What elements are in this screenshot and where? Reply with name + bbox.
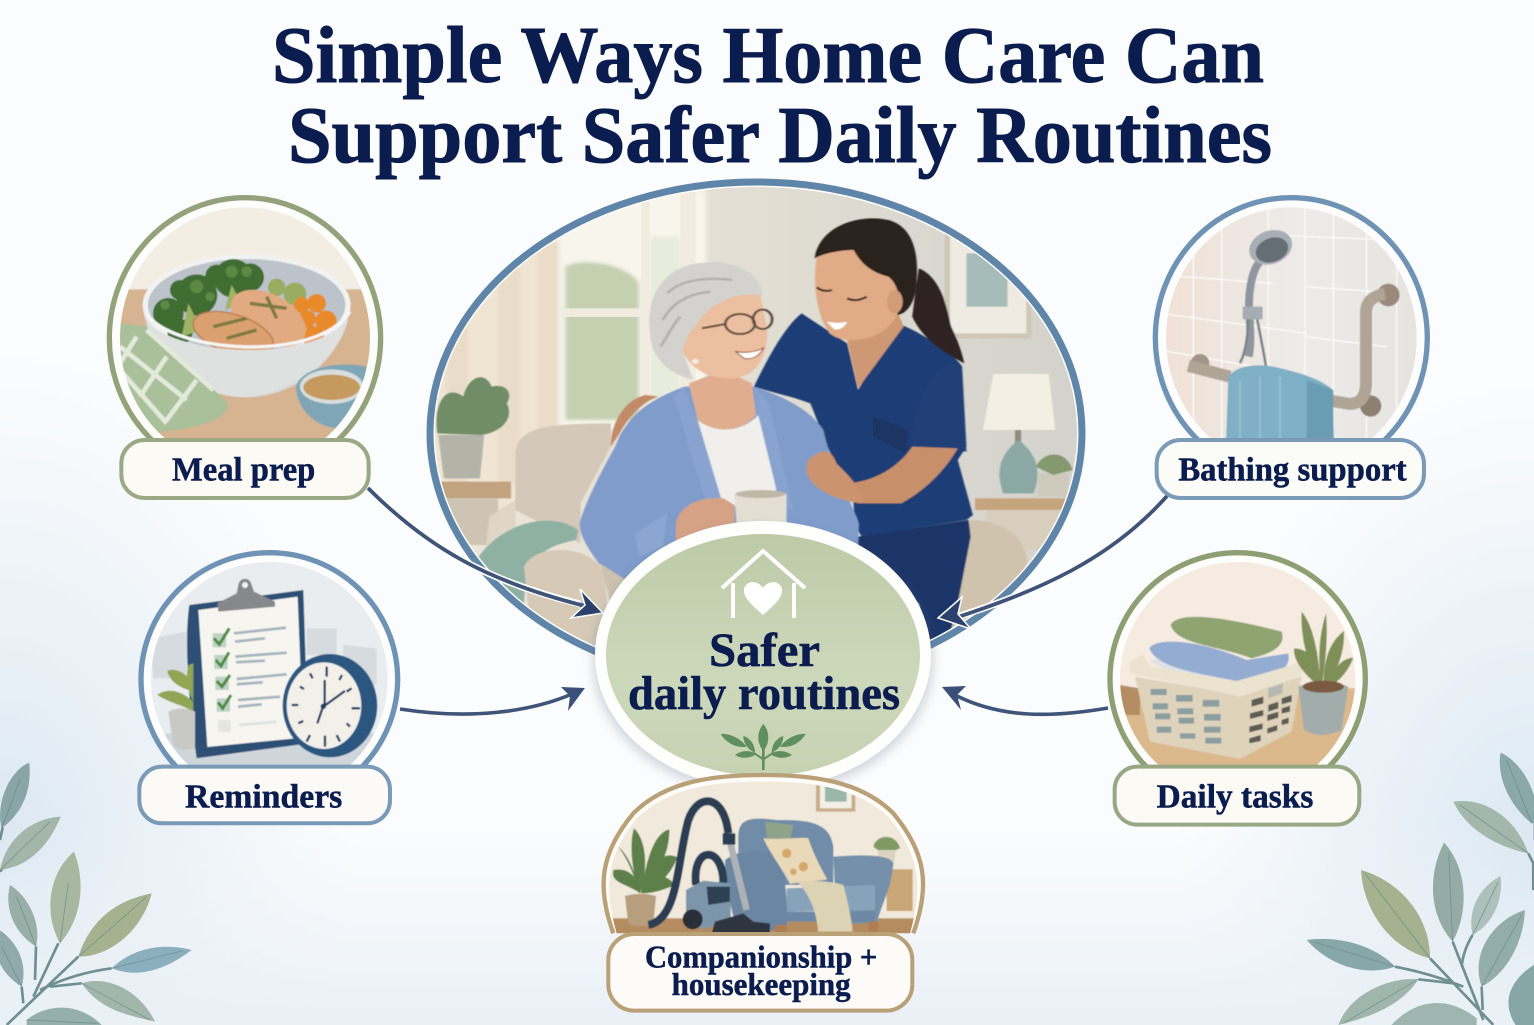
white tee and neck	[698, 415, 778, 507]
center heading: Safer	[709, 624, 820, 677]
label	[1157, 440, 1424, 498]
shoulder hand	[611, 395, 659, 447]
arrow: daily tasks to center	[942, 686, 1108, 714]
blanket and chair arm	[479, 521, 578, 607]
clipboard and clock scene	[151, 562, 388, 765]
armchair	[515, 423, 611, 543]
shower scene	[1166, 208, 1416, 438]
side tables	[975, 498, 1066, 510]
cardigan	[580, 387, 859, 590]
picture frame	[945, 232, 1031, 338]
mug	[734, 491, 786, 523]
center badge	[592, 521, 934, 795]
icon: green sprig	[721, 724, 806, 770]
icon: house with heart	[722, 551, 805, 618]
title: Simple Ways Home Care Can	[272, 12, 1264, 100]
glasses	[702, 310, 772, 334]
nurse hair	[815, 218, 917, 315]
nurse pants	[858, 520, 971, 650]
nurse scrub top	[754, 313, 973, 537]
panel: bathing support	[1140, 190, 1440, 498]
label: Reminders	[185, 779, 342, 816]
gray hair	[649, 262, 763, 380]
left plant	[437, 377, 509, 435]
panel: meal prep	[106, 195, 384, 500]
nurse neck	[847, 310, 904, 388]
label	[1115, 767, 1359, 825]
title	[272, 12, 1272, 180]
center heading	[628, 624, 900, 720]
arrow: meal prep to center	[368, 488, 603, 618]
center heading: daily routines	[628, 667, 900, 720]
woman's hand	[676, 498, 734, 543]
panel: main photo of caregiver and older woman	[426, 178, 1086, 655]
food scene	[120, 208, 370, 438]
label: housekeeping	[672, 967, 851, 1002]
label	[608, 934, 912, 1011]
panel: companionship and housekeeping	[590, 770, 930, 1011]
label	[139, 767, 390, 823]
nurse forearm and hand	[849, 447, 958, 503]
nurse face	[815, 243, 900, 340]
panel: reminders	[130, 545, 410, 823]
arrow: bathing support to center	[938, 496, 1167, 629]
face	[682, 294, 768, 378]
label	[121, 440, 369, 498]
title: Support Safer Daily Routines	[288, 92, 1272, 180]
panel: daily tasks	[1100, 545, 1380, 825]
nurse ponytail	[912, 268, 964, 363]
vacuum and armchair scene	[609, 782, 918, 934]
corner leaves: bottom left	[0, 763, 192, 1025]
label: Daily tasks	[1157, 779, 1313, 816]
label: Bathing support	[1178, 451, 1407, 488]
laundry scene	[1120, 562, 1356, 765]
lamp	[983, 374, 1055, 430]
label: Meal prep	[172, 451, 315, 488]
photo scene	[435, 187, 1077, 646]
corner leaves: bottom right	[1307, 753, 1534, 1025]
label: Companionship +	[645, 939, 877, 974]
arrow: reminders to center	[400, 687, 585, 714]
